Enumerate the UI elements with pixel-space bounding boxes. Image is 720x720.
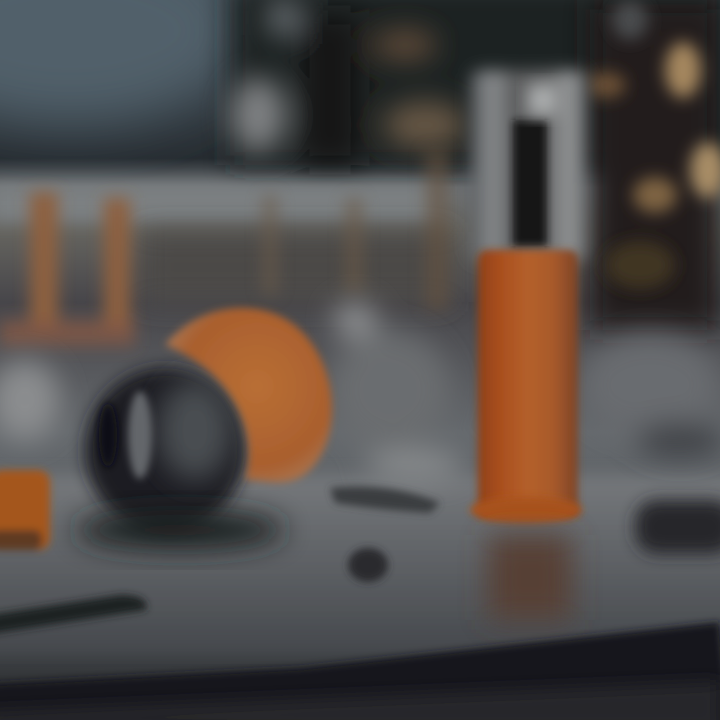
icon: dark camera lens object <box>75 368 285 550</box>
table: dark object at lower left <box>0 595 146 634</box>
icon: orange rounded object <box>165 308 332 482</box>
scattered silver fragments <box>0 302 720 479</box>
table surface <box>0 475 720 650</box>
icon: orange cup at left edge <box>0 470 50 550</box>
table: dark round mark <box>348 548 388 582</box>
background: horizontal pipe band <box>0 184 440 222</box>
background: golden bokeh cluster on the right <box>586 0 720 330</box>
background: faint vertical rods <box>262 150 449 310</box>
background: blurred orange rods on the left <box>0 192 135 346</box>
table: foreground dark edge <box>0 622 720 720</box>
background: upper left blue haze <box>0 0 245 125</box>
bottle reflection on the table <box>488 535 572 620</box>
table: foreground bottom shade <box>0 682 720 720</box>
background: dark upper centre <box>230 0 720 165</box>
icon: tall bottle, steel top and orange body <box>470 70 588 523</box>
table: dark object at right <box>635 500 720 554</box>
table: dark pen-like object <box>330 487 440 513</box>
background: shelf zone under the band <box>140 232 450 302</box>
background: blurred objects at top <box>230 0 467 165</box>
